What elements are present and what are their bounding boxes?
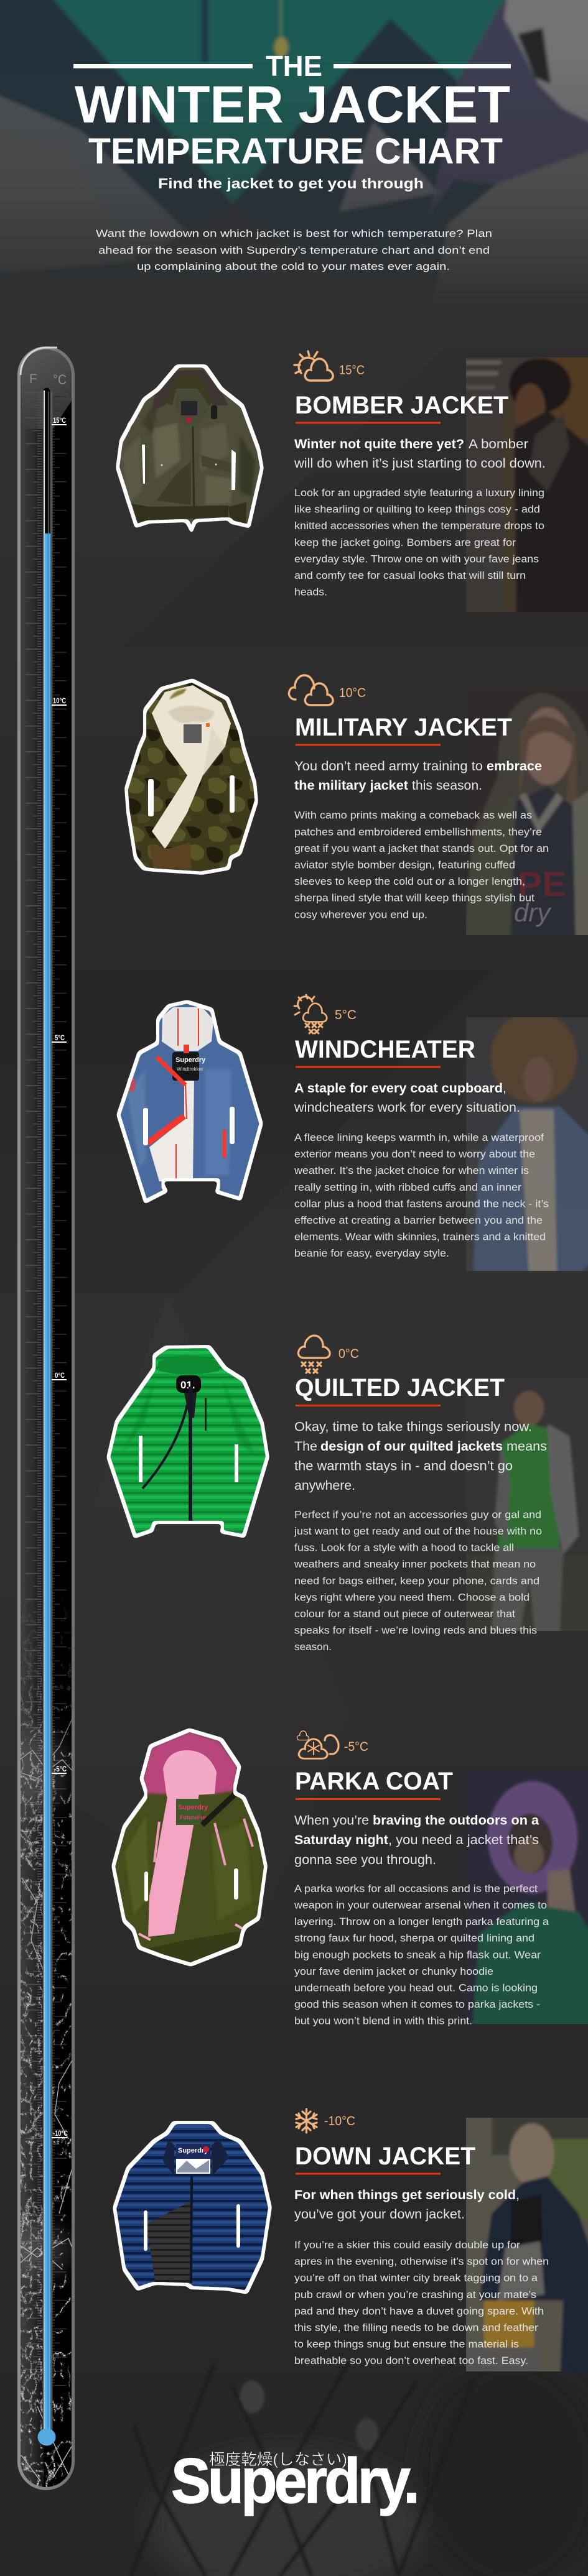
body text: everyday style. Throw one on with your fave jeans (294, 553, 539, 565)
logo japanese line: 極度乾燥(しなさい) (209, 2451, 347, 2468)
glass border (19, 348, 73, 2488)
panel: down jacket (113, 2109, 588, 2375)
accent rule (296, 1066, 441, 1068)
temperature: -10C: -10°C (324, 2114, 355, 2128)
subtitle: Find the jacket to get you through (158, 175, 424, 192)
body text (294, 1883, 549, 2027)
body text: pad and they don’t have a duvet going spare. With (294, 2305, 544, 2317)
body text: strong faux fur hood, sherpa or quilted lining and (294, 1932, 534, 1944)
accent rule (296, 1405, 441, 1406)
label -10C (52, 2129, 68, 2138)
heading rule right (334, 64, 511, 68)
jacket: quilted (106, 1345, 269, 1539)
jacket: down: Superdry (178, 2147, 208, 2154)
title block (73, 50, 511, 272)
body text: keys right where you need them. Choose a bold (294, 1591, 530, 1603)
body text: patches and embroidered embellishments, they’re (294, 826, 542, 838)
jacket: bomber (116, 364, 264, 535)
lead text: this season. (412, 778, 482, 793)
title: WINTER JACKET: WINTER JACKET (75, 75, 510, 134)
panel: windcheater (116, 995, 588, 1275)
panel: quilted jacket (106, 1336, 588, 1653)
mercury tube (37, 387, 56, 2446)
panel: bomber jacket (116, 351, 588, 616)
thermometer (17, 346, 75, 2490)
model photo: quilted (466, 1389, 588, 1631)
lead text (294, 1420, 547, 1493)
accent rule (296, 1798, 441, 1800)
lead text (294, 1081, 520, 1115)
temperature: 5C: 5°C (335, 1008, 357, 1022)
lead text: Winter not quite there yet? (294, 437, 464, 451)
lead text: The (294, 1439, 317, 1454)
model photo: military: PE (518, 864, 566, 903)
icon: clouds and snowflake (297, 1731, 338, 1758)
jacket: parka: Superdry (178, 1804, 208, 1811)
temperature: 0C: 0°C (338, 1347, 359, 1361)
label -5C: -5°C (54, 1765, 67, 1773)
lead text: For when things get seriously cold (294, 2188, 516, 2202)
temperature: 10C: 10°C (339, 686, 366, 700)
lead text: embrace (487, 759, 542, 773)
body text: underneath before you head out. Camo is looking (294, 1982, 538, 1993)
body text: breathable so you don’t overheat too fast. Easy. (294, 2355, 528, 2366)
ice cracks (17, 1594, 72, 2490)
heading: military jacket: MILITARY JACKET (295, 714, 512, 741)
lead text: means (506, 1439, 547, 1454)
body text: sherpa lined style that will keep things stylish but (294, 892, 534, 904)
intro paragraph: ahead for the season with Superdry’s temperature chart and don’t end (98, 244, 490, 256)
footer fence background (0, 2357, 588, 2576)
body text: you’re off on that winter city break tagging on to a (294, 2272, 538, 2284)
body text (294, 1132, 549, 1259)
body text: apres in the evening, otherwise it’s spot on for when (294, 2256, 549, 2268)
lead text (294, 437, 546, 471)
body text: knitted accessories when the temperature drops to (294, 520, 544, 532)
jacket: military (124, 678, 258, 875)
body text (294, 487, 544, 598)
lead text: the warmth stays in - and doesn’t go (294, 1459, 513, 1473)
jacket: windcheater (116, 1000, 263, 1204)
body text: but you won’t blend in with this print. (294, 2015, 472, 2027)
lead text (294, 759, 542, 793)
heading: down jacket: DOWN JACKET (295, 2143, 475, 2170)
body text: beanie for easy, everyday style. (294, 1247, 449, 1259)
body text: Look for an upgraded style featuring a luxury lining (294, 487, 544, 499)
label 5C: 5°C (55, 1033, 65, 1042)
intro paragraph: Want the lowdown on which jacket is best for which temperature? Plan (96, 228, 492, 239)
body text: exterior means you don’t need to worry about the (294, 1148, 535, 1160)
logo: Superdry (171, 2445, 417, 2516)
accent rule (296, 744, 441, 746)
body text: A fleece lining keeps warmth in, while a waterproof (294, 1132, 544, 1143)
body text: keep the jacket going. Bombers are great for (294, 537, 516, 548)
body text (294, 1508, 542, 1653)
body text: effective at creating a barrier between you and the (294, 1214, 543, 1226)
body text: season. (294, 1641, 332, 1653)
model photo: military (466, 692, 588, 935)
heading: windcheater: WINDCHEATER (295, 1036, 475, 1063)
body text: If you’re a skier this could easily double up for (294, 2239, 520, 2251)
body text (294, 810, 549, 920)
lead text: anywhere. (294, 1479, 355, 1493)
body text: colour for a stand out piece of outerwear that (294, 1608, 515, 1620)
lead text: A staple for every coat cupboard (294, 1081, 503, 1096)
body text: A parka works for all occasions and is the perfect (294, 1883, 538, 1895)
lead text: When you’re (294, 1814, 369, 1828)
lead text: gonna see you through. (294, 1853, 436, 1867)
lead text: design of our quilted jackets (320, 1439, 503, 1454)
lead text (294, 1814, 539, 1867)
heading: bomber jacket: BOMBER JACKET (295, 392, 508, 419)
jacket: parka: FutureFur (180, 1814, 207, 1821)
model photo: down (466, 2118, 588, 2371)
icon: sun cloud and snow (294, 995, 327, 1033)
body text: just want to get ready and out of the house with no (294, 1525, 542, 1537)
lead text: you’ve got your down jacket. (294, 2207, 465, 2222)
accent rule (296, 2172, 441, 2175)
label 0C: 0°C (55, 1371, 65, 1380)
jacket: windcheater: Windtrekker (177, 1066, 203, 1072)
heading rule left (73, 64, 253, 68)
icon: snowflake (296, 2109, 317, 2133)
body text: weather. It’s the jacket choice for when winter is (294, 1165, 529, 1176)
lead text: Okay, time to take things seriously now. (294, 1420, 532, 1434)
lead text: braving the outdoors on a (373, 1814, 539, 1828)
lead text: You don’t need army training to (294, 759, 483, 773)
model photo: military: dry (514, 898, 552, 927)
body text: weapon in your outerwear arsenal when it comes to (294, 1899, 547, 1911)
title: TEMPERATURE CHART: TEMPERATURE CHART (88, 131, 503, 172)
label 15C: 15°C (53, 416, 66, 425)
scale letter C: °C (53, 372, 67, 387)
temperature: -5C: -5°C (344, 1740, 368, 1754)
lead text: the military jacket (294, 778, 408, 793)
body text: like shearling or quilting to keep things cosy - add (294, 504, 540, 515)
panel: parka coat (111, 1728, 588, 2027)
mercury bulb (37, 2429, 56, 2446)
body text: collar plus a hood that fastens around the neck - it’s (294, 1198, 549, 1209)
intro paragraph: up complaining about the cold to your mates ever again. (137, 261, 450, 272)
body text: need for bags either, keep your phone, cards and (294, 1575, 539, 1587)
body text: sleeves to keep the cold out or a longer length, (294, 875, 525, 887)
lead text: windcheaters work for every situation. (294, 1101, 520, 1115)
jacket: down (113, 2121, 272, 2294)
body text: big enough pockets to sneak a hip flask out. Wear (294, 1949, 541, 1960)
body text: really setting in, with ribbed cuffs and an inner (294, 1181, 521, 1193)
model photo: parka (466, 1771, 588, 2024)
label 10C: 10°C (53, 696, 66, 705)
lead text: Saturday night (294, 1833, 388, 1847)
icon: two clouds (289, 675, 333, 705)
jacket: parka (111, 1728, 268, 1967)
header background photo (0, 0, 588, 348)
body text: fuss. Look for a style with a hood to tackle all (294, 1542, 514, 1554)
body text: weathers and sneaky inner pockets that mean no (294, 1558, 536, 1570)
lead text: , (516, 2188, 520, 2202)
panel: military jacket (124, 675, 588, 939)
body text: speaks for itself - we’re loving reds and blues this (294, 1625, 537, 1637)
jacket: windcheater: Superdry (175, 1056, 206, 1064)
label -10C: -10°C (53, 2129, 68, 2138)
temperature: 15C: 15°C (339, 363, 365, 377)
lead text (294, 2188, 520, 2222)
body text: your fave denim jacket or chunky hoodie (294, 1965, 493, 1977)
body text: aviator style bomber design, featuring cuffed (294, 859, 515, 870)
jacket: quilted: 01. (180, 1379, 195, 1391)
accent rule (296, 422, 441, 424)
body text: elements. Wear with skinnies, trainers and a knitted (294, 1231, 546, 1243)
scale letter F: F (29, 372, 37, 386)
lead text: A bomber (469, 437, 528, 451)
heading: parka coat: PARKA COAT (295, 1768, 453, 1795)
icon: cloud and snow (298, 1336, 330, 1373)
model photo: windcheater (466, 1017, 588, 1271)
icon: sun behind cloud (294, 351, 333, 381)
body text: and comfy tee for casual looks that will still turn (294, 570, 526, 581)
title: THE: THE (266, 50, 322, 82)
body text: Perfect if you’re not an accessories guy or gal and (294, 1508, 541, 1520)
body text: great if you want a jacket that stands out. Opt for an (294, 843, 549, 854)
body text: pub crawl or when you’re crashing at your mate’s (294, 2289, 536, 2301)
lead text: will do when it’s just starting to cool down. (294, 456, 546, 471)
heading: quilted jacket: QUILTED JACKET (295, 1374, 505, 1401)
lead text: , you need a jacket that’s (388, 1833, 539, 1847)
model photo: bomber (466, 358, 588, 612)
body text: heads. (294, 586, 327, 598)
body text: this style, the filling needs to be down and feather (294, 2322, 538, 2334)
body text: to keep things snug but ensure the material is (294, 2338, 519, 2350)
intro paragraph (96, 228, 492, 272)
body text: layering. Throw on a longer length parka featuring a (294, 1916, 549, 1927)
body text: With camo prints making a comeback as well as (294, 810, 532, 821)
lead text: , (503, 1081, 506, 1096)
body text: good this season when it comes to parka jackets - (294, 1998, 540, 2010)
body text (294, 2239, 549, 2366)
logo wordmark: Superdry. (171, 2445, 417, 2516)
body text: cosy wherever you end up. (294, 908, 427, 920)
label -5C (52, 1765, 67, 1774)
